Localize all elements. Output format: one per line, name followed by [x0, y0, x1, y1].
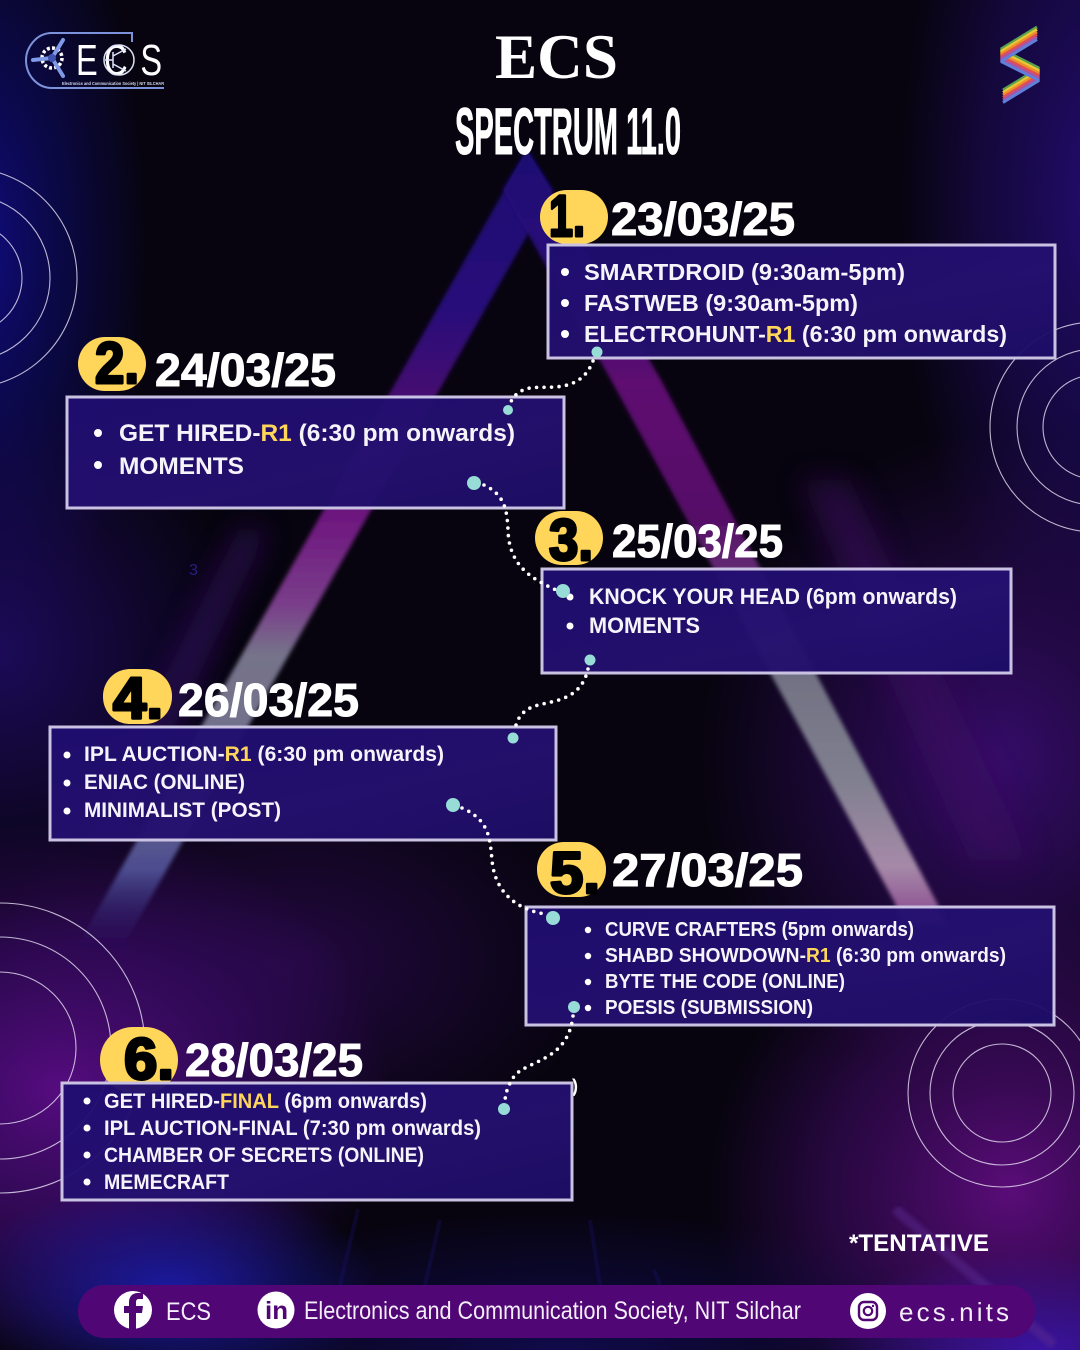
list 3: KNOCK YOUR HEAD (6pm onwards): [589, 584, 957, 609]
stray faint number: 3: [189, 562, 198, 579]
box 5: [526, 907, 1054, 1025]
connector 4 to 5: [446, 798, 560, 925]
list 4: IPL AUCTION-R1 (6:30 pm onwards): [84, 743, 444, 766]
day 6 panel: [62, 1027, 578, 1200]
box 1: [548, 245, 1055, 358]
concentric rings: right: [990, 322, 1080, 532]
logo: rainbow S: [1001, 27, 1039, 102]
date 4: 26/03/25: [178, 674, 359, 726]
date 1: 23/03/25: [611, 193, 795, 245]
concentric rings: top left: [0, 168, 77, 388]
list 1: SMARTDROID (9:30am-5pm): [584, 259, 905, 285]
badge 4: 4.: [113, 666, 163, 731]
connector 3 to 4: [508, 654, 596, 744]
logo: ECS: Electronics and Communication Society | NIT SILCHAR: [62, 81, 165, 86]
logo: ECS: [26, 33, 165, 88]
list 2: GET HIRED-R1 (6:30 pm onwards): [119, 420, 515, 447]
list 6: CHAMBER OF SECRETS (ONLINE): [104, 1144, 424, 1167]
list 5: CURVE CRAFTERS (5pm onwards): [605, 919, 914, 941]
footer label: instagram handle: ecs.nits: [899, 1297, 1009, 1327]
connector 2 to 3: [467, 476, 570, 598]
badge 1: 1.: [549, 184, 585, 249]
list 5: SHABD SHOWDOWN-R1 (6:30 pm onwards): [605, 945, 1006, 967]
date 2: 24/03/25: [155, 344, 336, 396]
connector 5 to 6: [498, 1001, 580, 1115]
badge 6: 6.: [124, 1027, 174, 1092]
date 5: 27/03/25: [612, 844, 803, 896]
logo: ECS: ECS: [76, 36, 162, 85]
concentric rings: bottom right: [908, 999, 1080, 1187]
stray bracket: ): [572, 1076, 578, 1096]
box 3: [542, 569, 1011, 673]
footer bar: [78, 1285, 1035, 1338]
list 5: [585, 919, 1006, 1019]
footer label: society: Electronics and Communication Society, NIT Silchar: [304, 1297, 801, 1325]
box 2: [67, 397, 564, 508]
icon: instagram: [850, 1293, 886, 1329]
list 6: MEMECRAFT: [104, 1171, 229, 1194]
day 5 panel: [526, 841, 1054, 1025]
badge 5: 5.: [550, 841, 600, 906]
footer background: [78, 1285, 1035, 1338]
badge 6: [100, 1027, 178, 1093]
concentric rings: bottom left: [0, 903, 145, 1193]
footer label: ECS: ECS: [166, 1298, 211, 1326]
date 3: 25/03/25: [612, 515, 783, 567]
list 2: [94, 420, 515, 480]
title: ECS: ECS: [495, 21, 618, 92]
box 6: [62, 1083, 572, 1200]
list 6: [84, 1090, 481, 1194]
tentative note: *TENTATIVE: [849, 1230, 989, 1257]
list 6: IPL AUCTION-FINAL (7:30 pm onwards): [104, 1117, 481, 1140]
list 5: POESIS (SUBMISSION): [605, 997, 813, 1019]
day 3 panel: [535, 508, 1011, 673]
date 6: 28/03/25: [185, 1034, 363, 1086]
icon: facebook: [114, 1291, 152, 1329]
badge 2: 2.: [95, 331, 139, 396]
day 4 panel: [50, 666, 556, 840]
list 1: FASTWEB (9:30am-5pm): [584, 290, 858, 316]
icon: linkedin: in: [265, 1297, 288, 1325]
connector 1 to 2: [503, 346, 602, 415]
list 1: [561, 259, 1007, 347]
badge 3: 3.: [549, 508, 593, 573]
list 4: ENIAC (ONLINE): [84, 771, 245, 794]
list 3: MOMENTS: [589, 613, 700, 638]
list 4: MINIMALIST (POST): [84, 799, 281, 822]
list 5: BYTE THE CODE (ONLINE): [605, 971, 845, 993]
box 4: [50, 727, 556, 840]
list 6: GET HIRED-FINAL (6pm onwards): [104, 1090, 427, 1113]
icon: linkedin: [258, 1292, 294, 1328]
day 1 panel: [540, 184, 1055, 358]
list 2: MOMENTS: [119, 453, 244, 480]
list 1: ELECTROHUNT-R1 (6:30 pm onwards): [584, 321, 1007, 347]
list 4: [64, 743, 444, 822]
day 2 panel: [67, 331, 564, 508]
infographic canvas: SPECTRUM 11.0: [455, 94, 681, 168]
list 3: [566, 584, 957, 638]
